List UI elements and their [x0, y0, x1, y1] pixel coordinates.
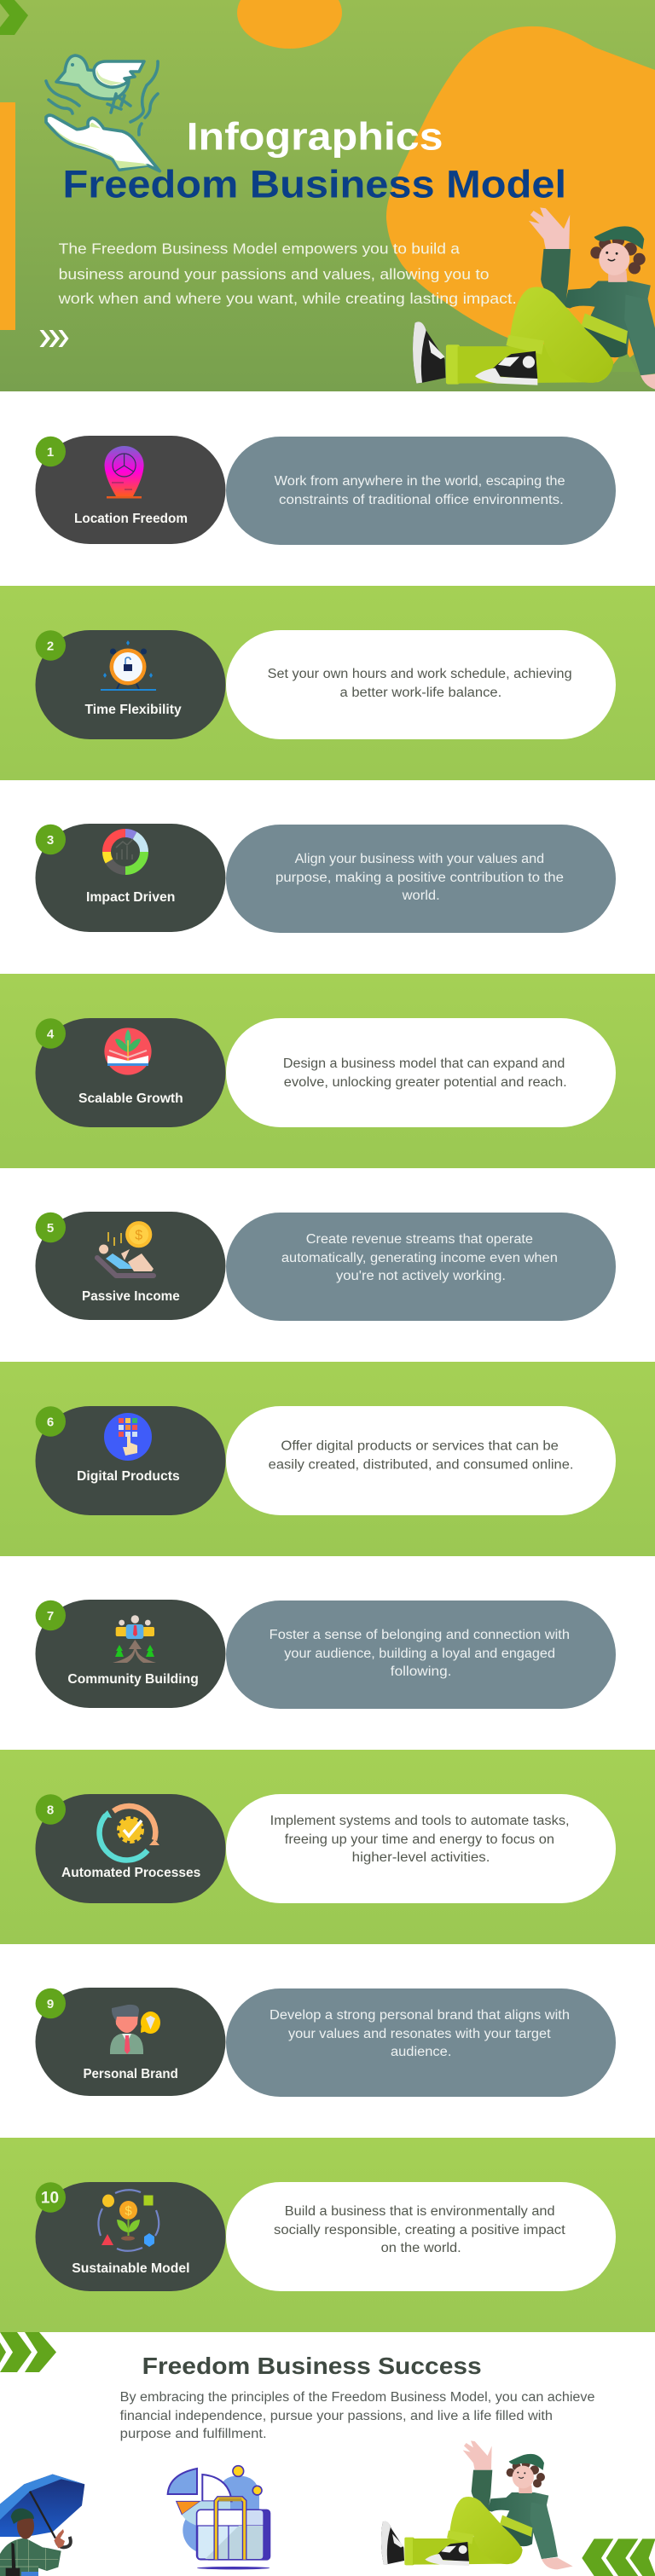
label: Automated Processes: [61, 1866, 200, 1880]
description: Work from anywhere in the world, escaping the: [275, 474, 565, 489]
description: Design a business model that can expand and: [283, 1056, 565, 1071]
label: Digital Products: [77, 1469, 180, 1484]
icon: sprout on book: [104, 1028, 152, 1075]
description pill: [226, 2182, 616, 2291]
item 3: Impact Driven: [36, 824, 616, 933]
description: freeing up your time and energy to focus on: [285, 1832, 554, 1847]
footer paragraph: financial independence, pursue your passions, and live a life filled with: [120, 2409, 553, 2423]
panel: hero: [0, 0, 655, 391]
item 7: Community Building: [36, 1600, 616, 1709]
number badge: [36, 1794, 66, 1825]
label: Passive Income: [82, 1289, 180, 1304]
orange blob: [386, 26, 655, 365]
label: Location Freedom: [74, 512, 188, 526]
icon: businessman with diamond bubble: [110, 2005, 160, 2054]
description: Create revenue streams that operate: [306, 1232, 533, 1247]
orange circle top: [237, 0, 342, 49]
hero paragraph: work when and where you want, while creating lasting impact.: [57, 290, 517, 307]
orange left bar: [0, 102, 15, 330]
number badge: 2: [47, 640, 54, 653]
label: Time Flexibility: [85, 703, 182, 717]
number badge: [36, 630, 66, 661]
footer paragraph: By embracing the principles of the Freedom Business Model, you can achieve: [120, 2390, 594, 2405]
icon: white chevrons: [39, 330, 68, 347]
icon: gear and cycle arrows: [100, 1806, 159, 1860]
title: Freedom Business Model: Freedom Business Model: [63, 163, 566, 206]
label: Impact Driven: [86, 890, 175, 905]
number badge: [36, 825, 66, 854]
green band 10: [0, 2138, 655, 2332]
description pill: [226, 1213, 616, 1321]
chevrons top left: [0, 2332, 56, 2372]
item 6: Digital Products: [36, 1406, 616, 1515]
dark pill: [36, 1988, 225, 2096]
icon: money plant cycle: [98, 2190, 159, 2251]
label: Scalable Growth: [78, 1091, 183, 1106]
number badge: 3: [47, 833, 54, 848]
dark pill: [36, 2182, 225, 2291]
description: your values and resonates with your target: [288, 2027, 551, 2041]
description: Develop a strong personal brand that aligns with: [270, 2008, 570, 2023]
footer paragraph: purpose and fulfillment.: [120, 2427, 267, 2441]
hero paragraph: The Freedom Business Model empowers you to build a: [59, 240, 460, 258]
description: easily created, distributed, and consumed online.: [269, 1458, 573, 1473]
dark pill: [36, 824, 225, 932]
description: Offer digital products or services that can be: [281, 1439, 559, 1454]
icon: keypad with hand: [104, 1413, 152, 1461]
description: [270, 1628, 570, 1679]
number badge: [36, 1018, 66, 1049]
description: [268, 667, 572, 700]
label: Sustainable Model: [72, 2261, 189, 2276]
description: constraints of traditional office environments.: [279, 493, 564, 507]
description: Foster a sense of belonging and connection with: [270, 1628, 570, 1642]
description pill: [226, 1406, 616, 1515]
dark pill: [36, 1600, 225, 1708]
item 2: Time Flexibility: [36, 630, 616, 739]
description: on the world.: [381, 2241, 461, 2255]
description: [281, 1232, 558, 1283]
number badge: 7: [47, 1609, 54, 1624]
dark pill: [36, 1212, 225, 1320]
item 9: Personal Brand: [36, 1988, 616, 2097]
description: Set your own hours and work schedule, achieving: [268, 667, 572, 681]
description: Align your business with your values and: [295, 852, 544, 866]
description pill: [226, 1018, 616, 1127]
dark pill: [36, 630, 225, 739]
description: purpose, making a positive contribution to the: [275, 871, 564, 885]
description: [283, 1056, 567, 1090]
item 5: Passive Income: [36, 1212, 616, 1321]
description: world.: [402, 889, 440, 903]
footer paragraph: [120, 2390, 594, 2441]
dark pill: [36, 1794, 225, 1903]
number badge: [36, 1406, 66, 1437]
illustration: waving person: [413, 207, 655, 391]
number badge: [36, 2182, 66, 2213]
description pill: [226, 1601, 616, 1709]
description: you're not actively working.: [336, 1269, 506, 1283]
item 8: Automated Processes: [36, 1794, 616, 1903]
description: Build a business that is environmentally and: [285, 2204, 554, 2219]
description: [270, 1814, 570, 1865]
panel: footer: [0, 2332, 655, 2576]
label: Community Building: [67, 1672, 199, 1687]
green bit behind person: [607, 350, 638, 372]
description: [270, 2008, 570, 2059]
illustration: waving person: [381, 2440, 573, 2569]
description pill: [226, 630, 616, 739]
description pill: [226, 437, 616, 545]
description: [269, 1439, 573, 1473]
number badge: [36, 437, 66, 466]
footer heading: Freedom Business Success: [142, 2353, 482, 2379]
number badge: 5: [47, 1221, 54, 1236]
green band 6: [0, 1362, 655, 1556]
green band 8: [0, 1750, 655, 1944]
number badge: 10: [41, 2190, 59, 2207]
label: Personal Brand: [84, 2067, 178, 2081]
icon: alarm clock with lock: [101, 640, 156, 691]
number badge: [36, 1988, 66, 2018]
item 10: Sustainable Model: [36, 2182, 616, 2291]
icon: location pin: [104, 446, 144, 498]
chevron top left: [0, 0, 28, 35]
description pill: [226, 825, 616, 933]
description: socially responsible, creating a positive impact: [274, 2223, 565, 2237]
item 1: Location Freedom: [36, 436, 616, 545]
green band 4: [0, 974, 655, 1168]
icon: lounging person with coin: $: [135, 1228, 142, 1243]
number badge: 4: [47, 1027, 55, 1042]
icon: people and road: [113, 1615, 156, 1663]
hero paragraph: [57, 240, 517, 307]
description: a better work-life balance.: [339, 686, 501, 700]
description: [275, 474, 565, 507]
number badge: 1: [47, 445, 54, 460]
description: higher-level activities.: [352, 1850, 490, 1865]
chevrons bottom right: [582, 2538, 655, 2576]
icon: donut chart: [107, 833, 144, 871]
title: Infographics: Infographics: [187, 115, 443, 159]
description pill: [226, 1988, 616, 2097]
description pill: [226, 1794, 616, 1903]
description: your audience, building a loyal and engaged: [284, 1647, 555, 1661]
number badge: 8: [47, 1803, 54, 1818]
illustration: person with umbrella: [0, 2475, 84, 2576]
icon: chart and suitcase: [168, 2466, 270, 2569]
description: [275, 852, 564, 903]
item 4: Scalable Growth: [36, 1018, 616, 1127]
description: audience.: [391, 2045, 451, 2059]
dark pill: [36, 1018, 225, 1127]
dark pill: [36, 436, 225, 544]
number badge: 9: [47, 1997, 54, 2012]
description: [274, 2204, 565, 2255]
description: following.: [391, 1664, 451, 1679]
icon: bird and hand: [46, 55, 159, 171]
description: Implement systems and tools to automate tasks,: [270, 1814, 570, 1828]
description: evolve, unlocking greater potential and reach.: [284, 1075, 567, 1090]
green band 2: [0, 586, 655, 780]
number badge: [36, 1213, 66, 1242]
number badge: 6: [47, 1415, 54, 1429]
hero paragraph: business around your passions and values, allowing you to: [59, 266, 490, 283]
icon: lounging person with coin: [97, 1221, 154, 1276]
icon: money plant cycle: $: [125, 2203, 132, 2219]
dark pill: [36, 1406, 225, 1515]
number badge: [36, 1601, 66, 1630]
description: automatically, generating income even when: [281, 1251, 558, 1265]
